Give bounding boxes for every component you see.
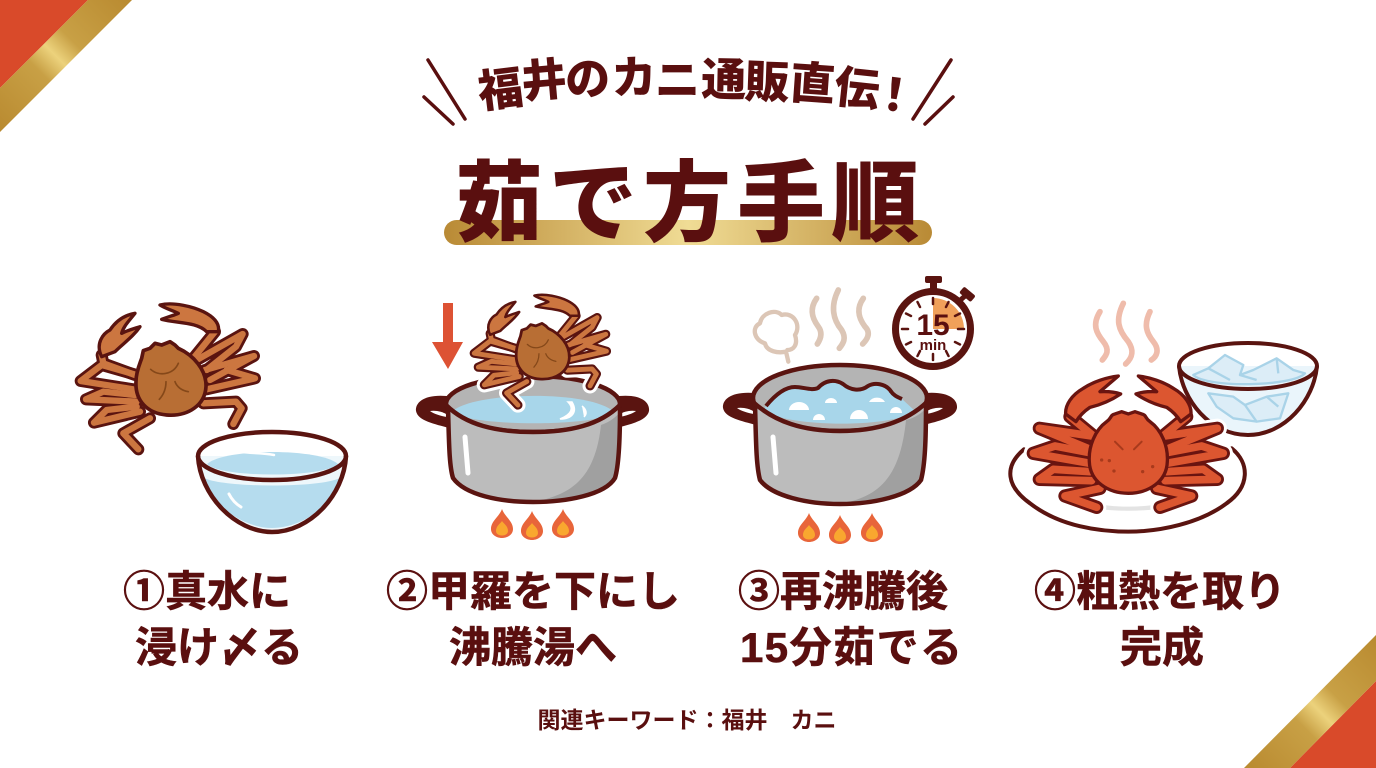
icon: 15 minute timer: min [920, 337, 946, 354]
step 2 label [386, 568, 680, 671]
step 4 label: 完成 [1120, 624, 1204, 671]
step 1 label: 浸け〆る [135, 624, 303, 671]
step 1 label [123, 568, 303, 671]
step 1 label: ①真水に [123, 568, 291, 615]
step 1 illustration [81, 304, 346, 532]
icon: steam puff [755, 312, 797, 362]
step 4 label [1034, 568, 1286, 671]
icon: heat steam [1096, 303, 1157, 364]
icon: 15 minute timer: 15 [916, 309, 950, 342]
corner ribbon: bottom right [1244, 635, 1376, 768]
icon: brown crab [81, 304, 255, 449]
step 3 illustration [723, 276, 976, 544]
emphasis lines left [424, 60, 465, 124]
icon: 15 minute timer [896, 276, 976, 366]
step 4 label: ④粗熱を取り [1034, 568, 1286, 615]
icon: down arrow [432, 303, 463, 369]
icon: water bowl [198, 432, 346, 532]
icon: boiling pot [723, 365, 957, 504]
icon: pot with water [416, 376, 649, 502]
step 3 label: ③再沸騰後 [738, 568, 948, 615]
icon: plate [1010, 448, 1245, 532]
step 3 label [738, 568, 962, 671]
emphasis lines right [913, 60, 953, 124]
step 2 illustration [416, 295, 649, 540]
step 3 label: 15分茹でる [740, 624, 962, 671]
icon: boiled red crab [1033, 376, 1223, 507]
corner ribbon: top left [0, 0, 132, 132]
step 2 label: 沸騰湯へ [449, 624, 617, 671]
icon: flames [798, 513, 883, 544]
related keywords footer: 関連キーワード：福井 カニ [538, 707, 836, 733]
icon: ice bowl [1179, 343, 1317, 435]
step 4 illustration [1010, 303, 1317, 532]
icon: steam lines [812, 290, 868, 348]
icon: flames [491, 509, 574, 540]
icon: brown crab dropping in [474, 295, 607, 405]
title underline: gold bar [444, 220, 932, 245]
subtitle: 福井のカニ通販直伝！ [475, 51, 920, 123]
main title: 茹で方手順 [455, 154, 925, 253]
step 2 label: ②甲羅を下にし [386, 568, 680, 615]
